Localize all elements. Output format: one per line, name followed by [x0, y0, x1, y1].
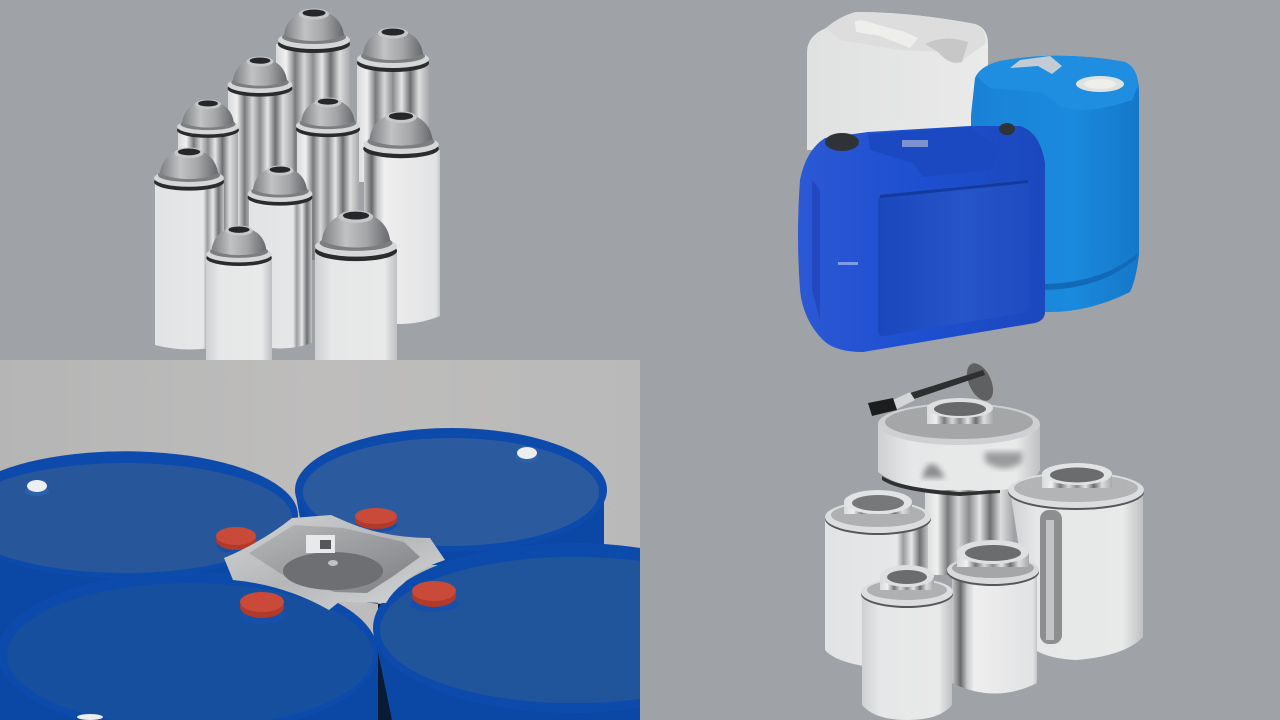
- red cap: top: [355, 508, 397, 532]
- drum: bottom right: [373, 543, 640, 720]
- red cap: bottom: [238, 592, 286, 624]
- can: right: [1008, 463, 1144, 660]
- brush: [868, 370, 985, 416]
- red cap: right: [410, 581, 458, 612]
- photo: aerosol cans: [154, 8, 440, 360]
- can: front right: [315, 210, 397, 360]
- metal plate: [224, 515, 445, 610]
- lid: [956, 353, 1008, 411]
- plug: white: [515, 447, 539, 462]
- drum: top left: [0, 451, 298, 650]
- can: back right: [357, 28, 429, 182]
- gap between lower drums: [339, 600, 392, 720]
- photo: tin cans with brush: [825, 353, 1144, 720]
- can: third row left: [177, 100, 239, 260]
- can: front left: [206, 226, 272, 360]
- plug: white: [25, 480, 49, 496]
- can: back centre: [276, 8, 350, 214]
- can: left: [825, 490, 931, 667]
- drum: top right: [295, 428, 607, 565]
- can: right tall: [363, 111, 440, 324]
- light blue drum: [971, 56, 1139, 312]
- can: left tall: [154, 148, 224, 350]
- drum: bottom left: [0, 572, 378, 720]
- photo backdrop: [0, 360, 640, 720]
- can: centre mid: [248, 166, 312, 348]
- barcode label: [306, 535, 335, 553]
- photo: plastic jerrycans and drum: [798, 12, 1139, 352]
- can: third row centre: [296, 98, 360, 260]
- can: large back: [878, 398, 1040, 575]
- dark blue jerrycan: [798, 123, 1045, 352]
- red cap: left: [216, 527, 256, 554]
- can: front centre: [947, 540, 1039, 694]
- can: second row left: [228, 57, 292, 258]
- plug: white: [77, 714, 103, 720]
- photo: blue steel drums with metal plate: [0, 360, 640, 720]
- white jerrycan: [807, 12, 988, 150]
- can: front small: [861, 565, 953, 720]
